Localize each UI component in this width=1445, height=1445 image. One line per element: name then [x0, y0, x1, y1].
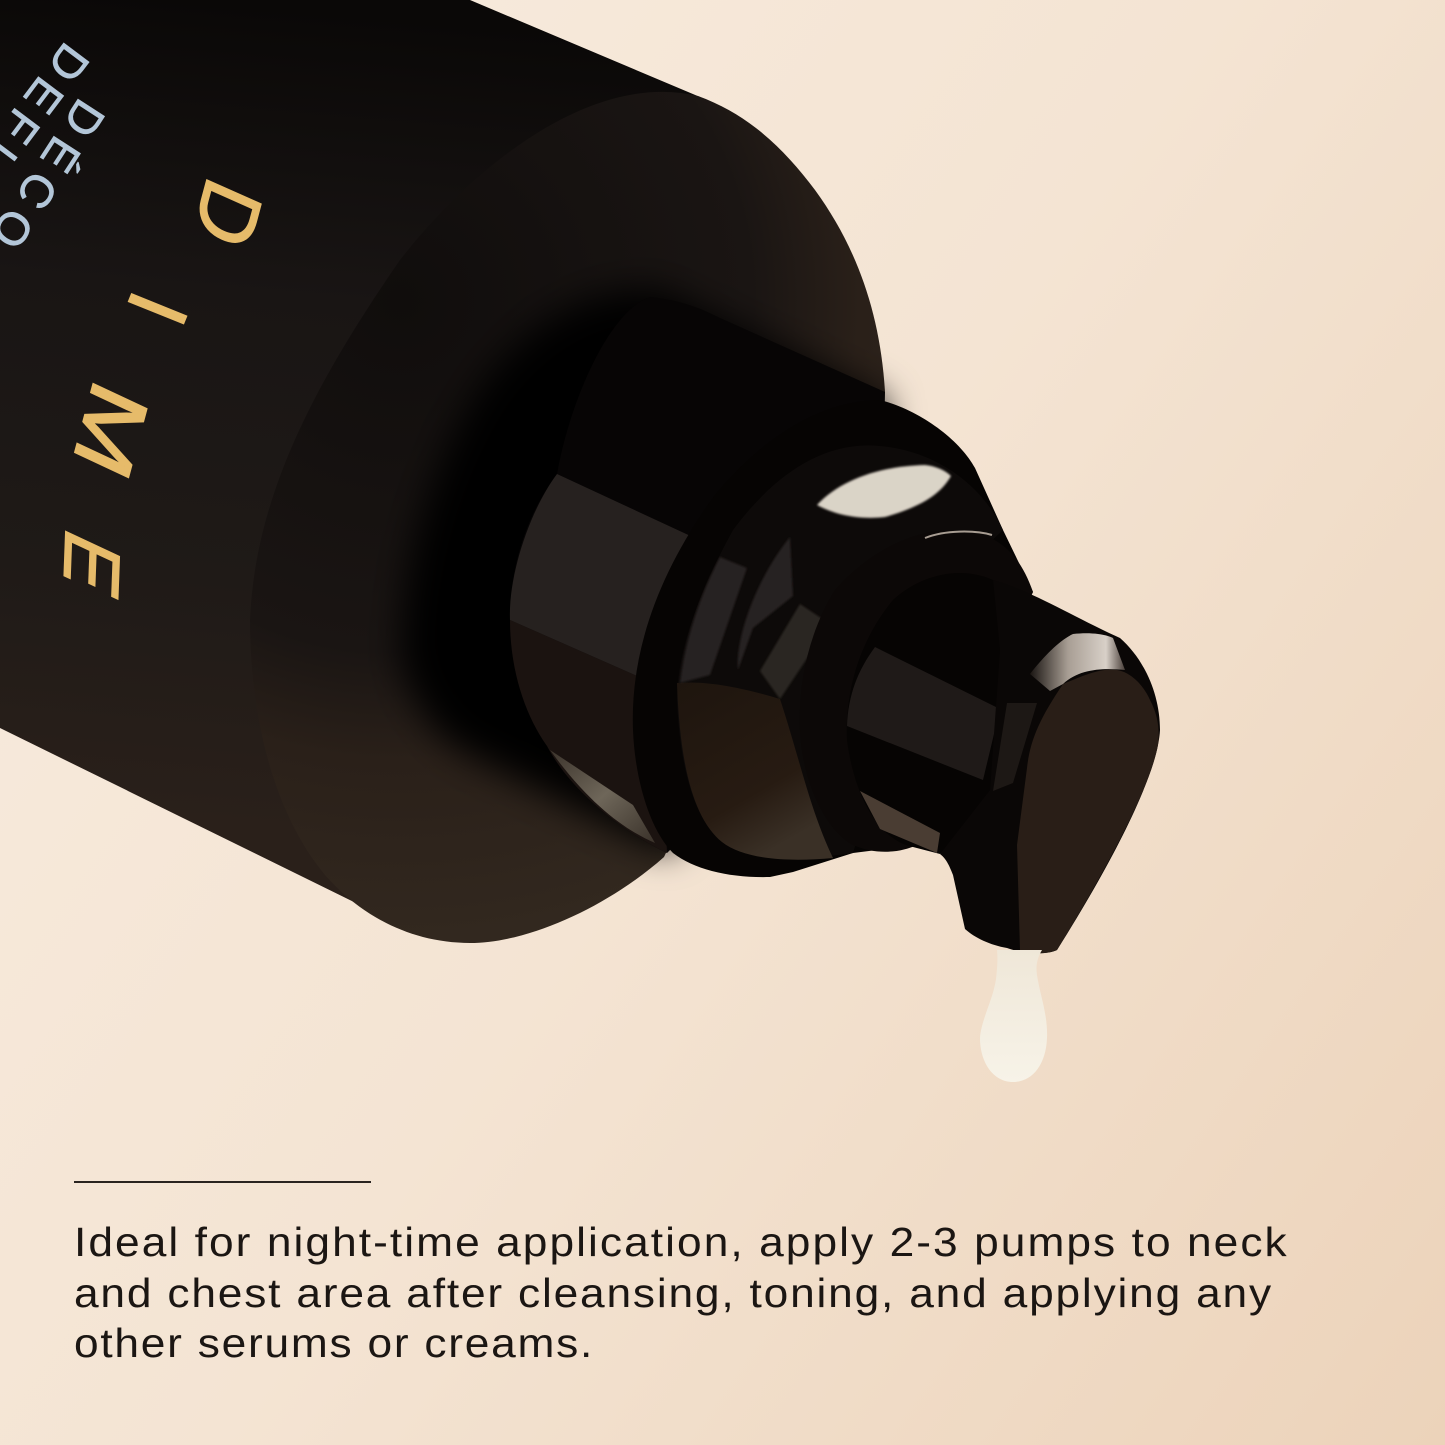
- brand wordmark DIME: I: [108, 280, 206, 338]
- caption text: Ideal for night-time application, apply 2-3 pumps to neck: [74, 1219, 1289, 1265]
- bulge white highlight: [817, 465, 951, 518]
- brand wordmark DIME: M: [56, 368, 165, 493]
- collar grey reflection: [510, 474, 710, 686]
- nozzle matte face: [1017, 670, 1159, 953]
- caption text: and chest area after cleansing, toning, and applying any: [74, 1270, 1273, 1316]
- bulge lower brown: [677, 682, 833, 860]
- cream drop: [980, 950, 1047, 1082]
- bottle base disc: [250, 92, 885, 943]
- brand wordmark DIME: [47, 166, 280, 612]
- divider rule: [74, 1181, 371, 1183]
- bottle body: [0, 0, 700, 905]
- nozzle rim highlight: [1030, 633, 1125, 691]
- pump collar: [510, 297, 885, 853]
- collar lower brown gloss: [510, 620, 667, 853]
- nozzle side facet: [993, 703, 1037, 791]
- brand wordmark DIME: E: [47, 517, 137, 612]
- bulge grey glints: [680, 537, 830, 699]
- pump ring: [633, 400, 1033, 877]
- caption text: [74, 1219, 1289, 1366]
- ring bulge: [677, 445, 1003, 858]
- pump nozzle head: [940, 580, 1160, 953]
- pump stem: [847, 573, 1080, 854]
- caption text: other serums or creams.: [74, 1320, 594, 1366]
- collar light reflection: [550, 750, 655, 843]
- neck shadow: [402, 290, 885, 853]
- second pump flange: [800, 530, 1033, 852]
- brand wordmark DIME: D: [176, 166, 280, 262]
